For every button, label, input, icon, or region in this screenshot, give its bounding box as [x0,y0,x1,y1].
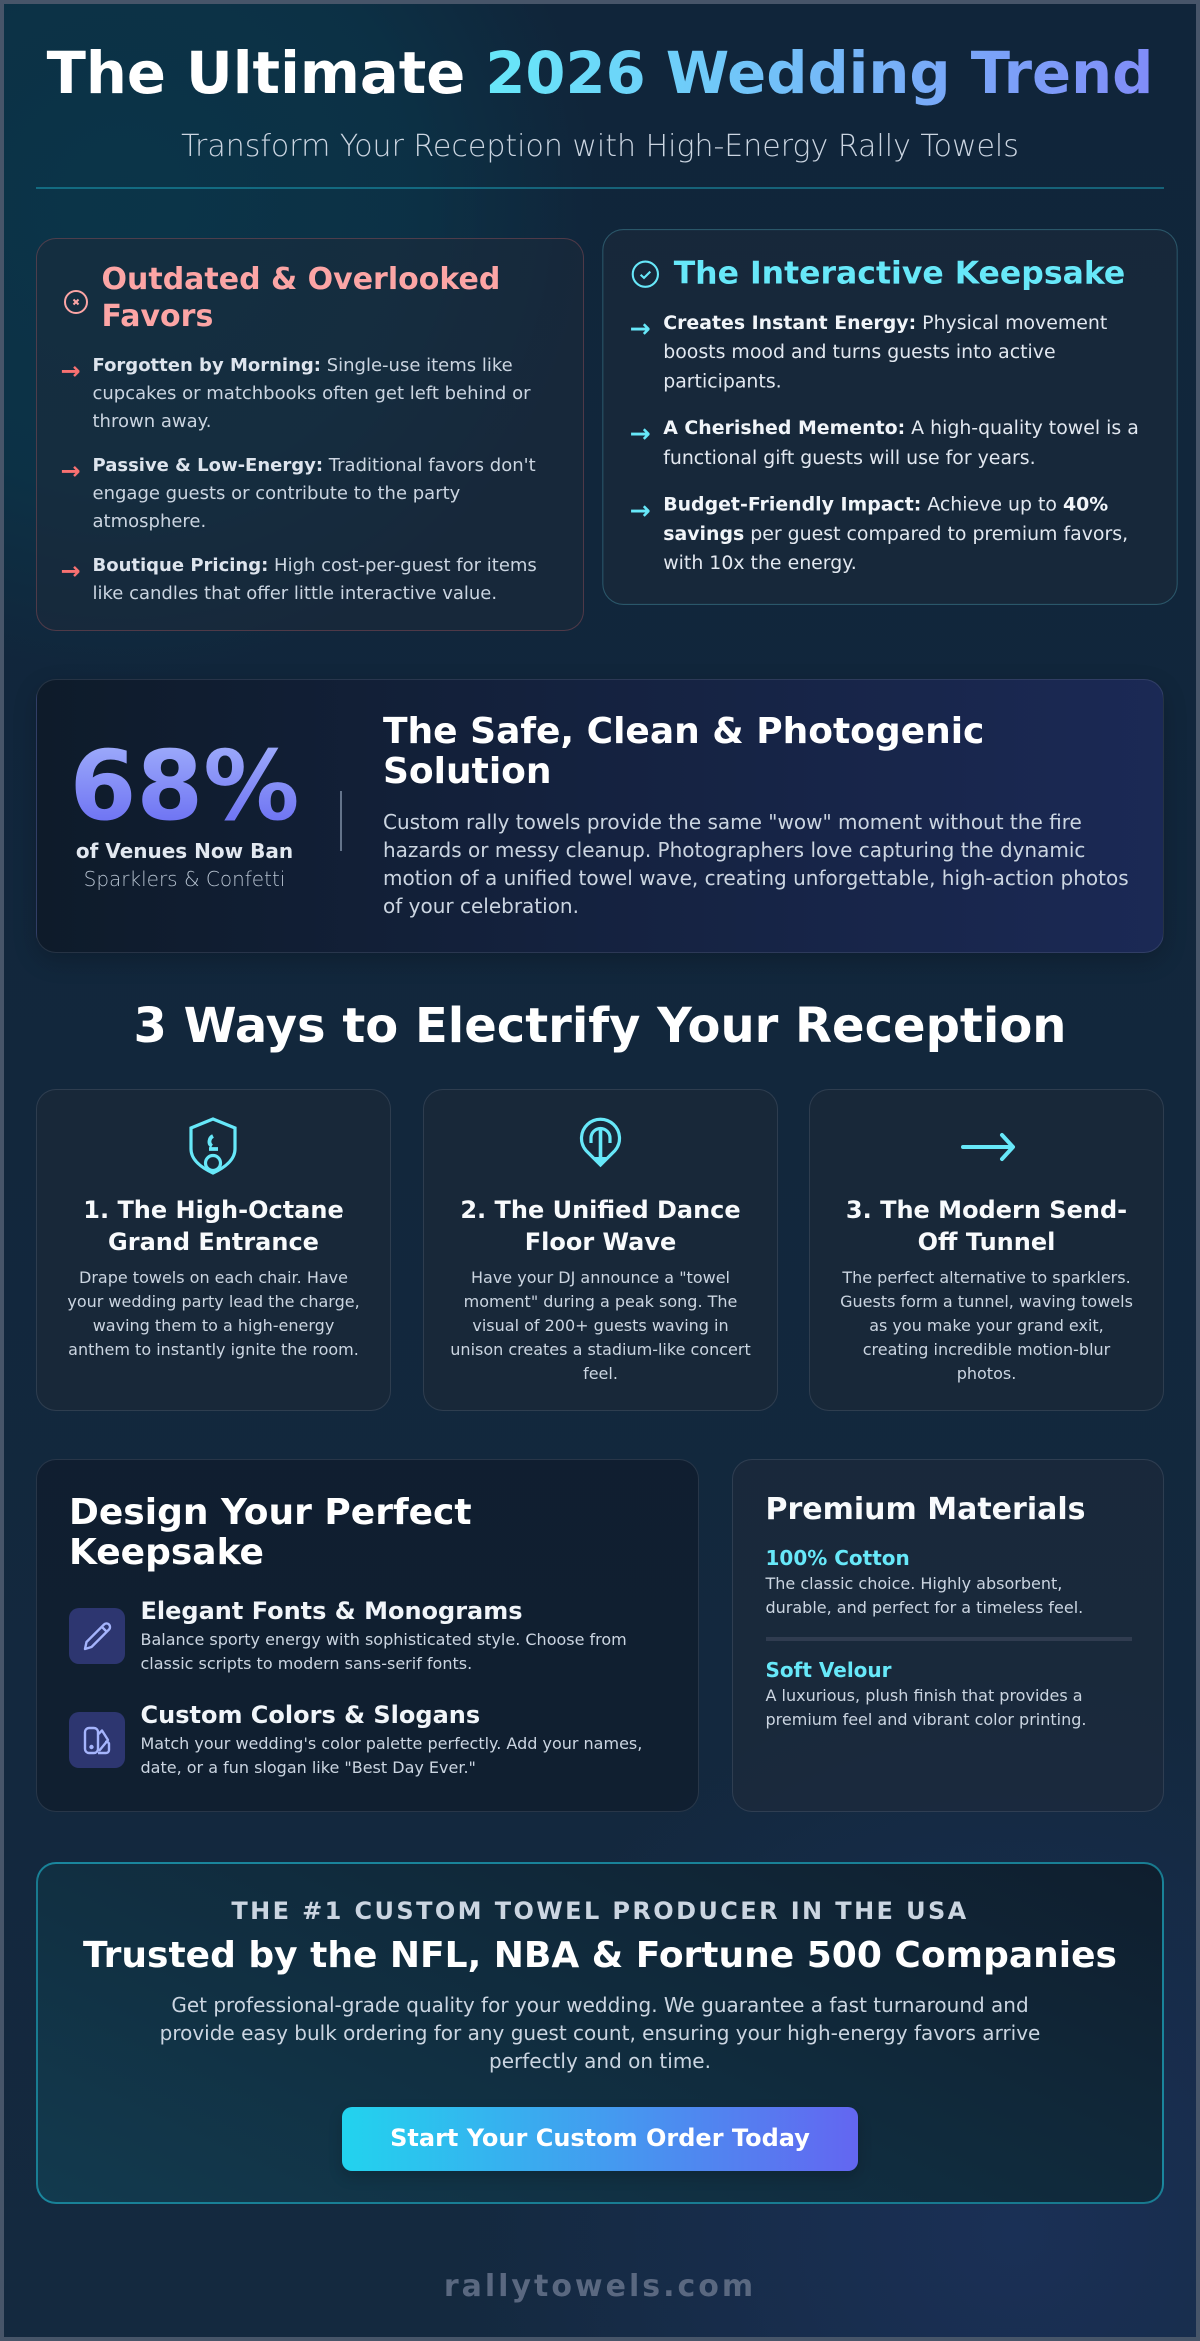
panel: outdated favors [36,238,584,631]
title: The Ultimate 2026 Wedding Trend [47,40,1153,107]
panel: trust call to action [36,1862,1164,2204]
feature: colors [140,1701,642,1777]
feature: colors: Match your wedding's color palette perfectly. Add your names, date, or a fun slogan like "Best Day Ever." [140,1734,642,1777]
list: keepsake points: A Cherished Memento: A high-quality towel is a functional gift guests will use for years. [663,417,1139,469]
list: keepsake points: → [630,314,651,344]
heading: outdated: Outdated & Overlooked Favors [102,262,500,334]
material: cotton [765,1546,1083,1616]
heading: design: Design Your Perfect Keepsake [69,1492,472,1573]
solution heading: The Safe, Clean & Photogenic Solution [383,711,984,792]
stat sublabel: Sparklers & Confetti [84,867,285,891]
kicker: THE #1 CUSTOM TOWEL PRODUCER IN THE USA [231,1897,969,1925]
heading: materials: Premium Materials [766,1492,1085,1526]
material divider [766,1636,1132,1640]
feature: fonts: Balance sporty energy with sophisticated style. Choose from classic scripts to modern sans-serif fonts. [140,1630,627,1673]
material: velour: Soft Velour [766,1658,892,1682]
list: outdated points: Forgotten by Morning: Single-use items like cupcakes or matchbooks often get left behind or thrown away. [92,355,530,432]
section heading: 3 ways: 3 Ways to Electrify Your Reception [134,998,1066,1054]
solution text: Custom rally towels provide the same "wow" moment without the fire hazards or messy cleanup. Photographers love capturing the dynamic motion of a unified towel wave, creating unforgettable, high-action photos of your celebration. [383,810,1129,918]
list: keepsake points: → [630,496,651,525]
list: keepsake points [630,312,1139,575]
material: velour [766,1658,1086,1728]
panel: interactive keepsake [602,229,1178,605]
material: cotton: The classic choice. Highly absorbent, durable, and perfect for a timeless feel. [766,1574,1083,1616]
subtitle: Transform Your Reception with High-Energy Rally Towels [181,129,1019,164]
footer url: rallytowels.com [444,2269,756,2304]
button: Start Your Custom Order Today [390,2124,810,2152]
step title: 1. The High-Octane Grand Entrance [83,1196,344,1256]
panel: 68% statistic [36,679,1164,953]
icon: shield [189,1117,237,1175]
trust text: Get professional-grade quality for your wedding. We guarantee a fast turnaround and provide easy bulk ordering for any guest count, ensuring your high-energy favors arrive perfectly and on time. [160,1993,1040,2073]
stat number: 68% [70,730,299,842]
step text: Have your DJ announce a "towel moment" during a peak song. The visual of 200+ guests waving in unison creates a stadium-like concert feel. [450,1268,751,1383]
material: cotton: 100% Cotton [766,1546,910,1570]
panel: design keepsake [36,1459,699,1812]
panel: premium materials [732,1459,1164,1812]
list: keepsake points: Creates Instant Energy: Physical movement boosts mood and turns guests into active participants. [663,312,1107,393]
list: outdated points: → [60,357,81,385]
list: outdated points [60,355,537,604]
trust heading: Trusted by the NFL, NBA & Fortune 500 Companies [83,1935,1117,1976]
list: keepsake points: → [630,420,651,449]
step title: 3. The Modern Send-Off Tunnel [846,1196,1127,1256]
icon: check circle [632,260,659,288]
feature: fonts: Elegant Fonts & Monograms [140,1597,523,1625]
header divider [36,187,1164,189]
heading: keepsake: The Interactive Keepsake [674,255,1125,292]
feature: fonts [140,1597,627,1673]
step text: The perfect alternative to sparklers. Guests form a tunnel, waving towels as you make your grand exit, creating incredible motion-blur photos. [840,1268,1133,1383]
material: velour: A luxurious, plush finish that provides a premium feel and vibrant color printing. [766,1686,1086,1728]
icon: pencil [69,1608,125,1664]
stat label: of Venues Now Ban [76,839,293,863]
icon: arrow [961,1132,1016,1162]
step text: Drape towels on each chair. Have your wedding party lead the charge, waving them to a high-energy anthem to instantly ignite the room. [67,1268,360,1359]
list: outdated points: Passive & Low-Energy: Traditional favors don't engage guests or contribute to the party atmosphere. [92,455,536,532]
card: dance floor wave [423,1089,778,1411]
list: outdated points: → [60,557,81,585]
icon: x circle [64,290,88,314]
list: outdated points: → [60,457,81,485]
feature: colors: Custom Colors & Slogans [140,1701,480,1729]
card: grand entrance [36,1089,391,1411]
stat divider [340,791,342,851]
list: keepsake points: Budget-Friendly Impact: Achieve up to 40% savings per guest compared to premium favors, with 10x the energy. [663,493,1128,575]
list: outdated points: Boutique Pricing: High cost-per-guest for items like candles that offer little interactive value. [92,555,537,604]
icon: pin [580,1118,622,1168]
icon: palette [69,1712,125,1768]
button [342,2107,858,2171]
card: send-off tunnel [809,1089,1164,1411]
step title: 2. The Unified Dance Floor Wave [460,1196,741,1256]
